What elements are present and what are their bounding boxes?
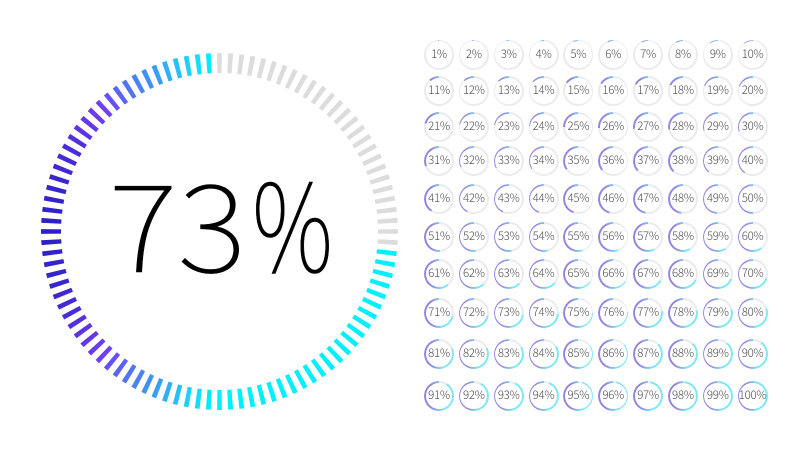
- large radial progress ring at 73%: [41, 53, 398, 410]
- 78%: [668, 298, 698, 328]
- 29%: [703, 112, 733, 142]
- 61%: [424, 259, 454, 289]
- 69%: 69%: [707, 265, 729, 281]
- 9%: [703, 40, 733, 70]
- 25%: 25%: [568, 118, 589, 134]
- 86%: [598, 339, 628, 369]
- 55%: [563, 222, 593, 252]
- 49%: [703, 184, 733, 214]
- 89%: [703, 339, 733, 369]
- 77%: [633, 298, 663, 328]
- 51%: 51%: [428, 228, 450, 244]
- 26%: 26%: [602, 118, 624, 134]
- 65%: [563, 259, 593, 289]
- 1%: 1%: [431, 46, 447, 62]
- 41%: [424, 184, 454, 214]
- 58%: 58%: [672, 228, 694, 244]
- 41%: 41%: [428, 190, 450, 206]
- 12%: 12%: [463, 82, 485, 98]
- 97%: [633, 381, 663, 411]
- 72%: [459, 298, 489, 328]
- 11%: [424, 76, 454, 106]
- 63%: 63%: [498, 265, 520, 281]
- 73%: 73%: [498, 304, 520, 320]
- 51%: [424, 222, 454, 252]
- 33%: 33%: [498, 152, 520, 168]
- 95%: 95%: [568, 387, 589, 403]
- 22%: 22%: [463, 118, 485, 134]
- 5%: [563, 40, 593, 70]
- 31%: 31%: [428, 152, 450, 168]
- 27%: 27%: [637, 118, 659, 134]
- 85%: 85%: [568, 345, 589, 361]
- 99%: [703, 381, 733, 411]
- 5%: 5%: [570, 46, 586, 62]
- 93%: [494, 381, 524, 411]
- 82%: 82%: [463, 345, 485, 361]
- 29%: 29%: [707, 118, 729, 134]
- 47%: [633, 184, 663, 214]
- 8%: [668, 40, 698, 70]
- 6%: 6%: [605, 46, 621, 62]
- 57%: [633, 222, 663, 252]
- gauge row 81 to 90: [424, 339, 768, 369]
- 87%: 87%: [637, 345, 659, 361]
- 65%: 65%: [568, 265, 589, 281]
- 39%: [703, 146, 733, 176]
- 36%: [598, 146, 628, 176]
- 19%: [703, 76, 733, 106]
- 61%: 61%: [428, 265, 450, 281]
- 67%: 67%: [637, 265, 659, 281]
- 48%: [668, 184, 698, 214]
- 52%: 52%: [463, 228, 485, 244]
- 55%: 55%: [568, 228, 589, 244]
- 10%: [738, 40, 768, 70]
- 15%: [563, 76, 593, 106]
- large percentage value: %: [252, 131, 333, 308]
- 71%: [424, 298, 454, 328]
- 38%: 38%: [672, 152, 694, 168]
- 42%: [459, 184, 489, 214]
- 96%: [598, 381, 628, 411]
- 88%: [668, 339, 698, 369]
- 94%: [529, 381, 559, 411]
- 14%: [529, 76, 559, 106]
- 64%: 64%: [533, 265, 554, 281]
- 90%: [738, 339, 768, 369]
- 30%: 30%: [742, 118, 763, 134]
- 71%: 71%: [428, 304, 450, 320]
- 62%: [459, 259, 489, 289]
- 34%: 34%: [533, 152, 554, 168]
- 35%: [563, 146, 593, 176]
- 92%: [459, 381, 489, 411]
- 45%: [563, 184, 593, 214]
- 99%: 99%: [707, 387, 729, 403]
- 79%: 79%: [707, 304, 729, 320]
- gauge row 61 to 70: [424, 259, 768, 289]
- 68%: [668, 259, 698, 289]
- large percentage value: 3: [178, 131, 246, 308]
- 78%: 78%: [672, 304, 694, 320]
- 13%: [494, 76, 524, 106]
- large percentage value: 7: [109, 131, 177, 308]
- 73%: [494, 298, 524, 328]
- 47%: 47%: [637, 190, 659, 206]
- 3%: [494, 40, 524, 70]
- gauge row 71 to 80: [424, 298, 768, 328]
- 68%: 68%: [672, 265, 694, 281]
- 12%: [459, 76, 489, 106]
- 82%: [459, 339, 489, 369]
- 42%: 42%: [463, 190, 485, 206]
- 17%: 17%: [637, 82, 659, 98]
- 74%: [529, 298, 559, 328]
- 46%: 46%: [602, 190, 624, 206]
- 16%: 16%: [602, 82, 624, 98]
- 52%: [459, 222, 489, 252]
- 81%: [424, 339, 454, 369]
- gauge row 41 to 50: [424, 184, 768, 214]
- 81%: 81%: [428, 345, 450, 361]
- 60%: [738, 222, 768, 252]
- 40%: 40%: [742, 152, 763, 168]
- 18%: 18%: [672, 82, 694, 98]
- 50%: [738, 184, 768, 214]
- 85%: [563, 339, 593, 369]
- 48%: 48%: [672, 190, 694, 206]
- 27%: [633, 112, 663, 142]
- 3%: 3%: [501, 46, 517, 62]
- gauge row 91 to 100: [424, 381, 768, 411]
- 59%: 59%: [707, 228, 729, 244]
- 66%: 66%: [602, 265, 624, 281]
- 56%: 56%: [602, 228, 624, 244]
- 46%: [598, 184, 628, 214]
- 70%: [738, 259, 768, 289]
- 100%: 100%: [739, 387, 766, 403]
- 60%: 60%: [742, 228, 763, 244]
- 9%: 9%: [710, 46, 726, 62]
- 2%: [459, 40, 489, 70]
- 28%: 28%: [672, 118, 694, 134]
- 43%: 43%: [498, 190, 520, 206]
- 87%: [633, 339, 663, 369]
- 53%: 53%: [498, 228, 520, 244]
- 83%: [494, 339, 524, 369]
- 38%: [668, 146, 698, 176]
- 76%: 76%: [602, 304, 624, 320]
- 84%: [529, 339, 559, 369]
- 10%: 10%: [742, 46, 763, 62]
- 57%: 57%: [637, 228, 659, 244]
- 90%: 90%: [742, 345, 763, 361]
- 80%: [738, 298, 768, 328]
- 67%: [633, 259, 663, 289]
- 21%: [424, 112, 454, 142]
- 50%: 50%: [742, 190, 763, 206]
- 32%: 32%: [463, 152, 485, 168]
- 69%: [703, 259, 733, 289]
- 7%: [633, 40, 663, 70]
- 18%: [668, 76, 698, 106]
- 36%: 36%: [602, 152, 624, 168]
- 39%: 39%: [707, 152, 729, 168]
- 96%: 96%: [602, 387, 624, 403]
- 77%: 77%: [637, 304, 659, 320]
- 43%: [494, 184, 524, 214]
- 95%: [563, 381, 593, 411]
- 26%: [598, 112, 628, 142]
- 75%: [563, 298, 593, 328]
- 64%: [529, 259, 559, 289]
- 76%: [598, 298, 628, 328]
- 6%: [598, 40, 628, 70]
- 94%: 94%: [533, 387, 554, 403]
- 35%: 35%: [568, 152, 589, 168]
- 44%: [529, 184, 559, 214]
- 49%: 49%: [707, 190, 729, 206]
- 15%: 15%: [568, 82, 589, 98]
- 2%: 2%: [466, 46, 482, 62]
- 63%: [494, 259, 524, 289]
- 37%: [633, 146, 663, 176]
- 59%: [703, 222, 733, 252]
- gauge row 1 to 10: [424, 40, 768, 70]
- 98%: 98%: [672, 387, 694, 403]
- 62%: 62%: [463, 265, 485, 281]
- 20%: [738, 76, 768, 106]
- 70%: 70%: [742, 265, 763, 281]
- 22%: [459, 112, 489, 142]
- 75%: 75%: [568, 304, 589, 320]
- 8%: 8%: [675, 46, 691, 62]
- 86%: 86%: [602, 345, 624, 361]
- 88%: 88%: [672, 345, 694, 361]
- 89%: 89%: [707, 345, 729, 361]
- 72%: 72%: [463, 304, 485, 320]
- 23%: [494, 112, 524, 142]
- 24%: 24%: [533, 118, 554, 134]
- gauge row 11 to 20: [424, 76, 768, 106]
- 44%: 44%: [533, 190, 554, 206]
- 54%: 54%: [533, 228, 554, 244]
- 84%: 84%: [533, 345, 554, 361]
- 98%: [668, 381, 698, 411]
- 13%: 13%: [498, 82, 520, 98]
- 100%: [738, 381, 768, 411]
- 91%: [424, 381, 454, 411]
- 56%: [598, 222, 628, 252]
- 14%: 14%: [533, 82, 554, 98]
- 54%: [529, 222, 559, 252]
- 4%: 4%: [536, 46, 551, 62]
- 93%: 93%: [498, 387, 520, 403]
- 40%: [738, 146, 768, 176]
- 74%: 74%: [533, 304, 554, 320]
- 17%: [633, 76, 663, 106]
- 28%: [668, 112, 698, 142]
- 97%: 97%: [637, 387, 659, 403]
- 34%: [529, 146, 559, 176]
- 7%: 7%: [640, 46, 656, 62]
- gauge row 21 to 30: [424, 112, 768, 142]
- 58%: [668, 222, 698, 252]
- 16%: [598, 76, 628, 106]
- 83%: 83%: [498, 345, 520, 361]
- 53%: [494, 222, 524, 252]
- 1%: [424, 40, 454, 70]
- 32%: [459, 146, 489, 176]
- 4%: [529, 40, 559, 70]
- 91%: 91%: [428, 387, 450, 403]
- 30%: [738, 112, 768, 142]
- 80%: 80%: [742, 304, 763, 320]
- 19%: 19%: [707, 82, 729, 98]
- 21%: 21%: [428, 118, 450, 134]
- gauge row 51 to 60: [424, 222, 768, 252]
- 23%: 23%: [498, 118, 520, 134]
- 31%: [424, 146, 454, 176]
- 11%: 11%: [428, 82, 450, 98]
- 45%: 45%: [568, 190, 589, 206]
- 20%: 20%: [742, 82, 763, 98]
- 66%: [598, 259, 628, 289]
- 33%: [494, 146, 524, 176]
- 24%: [529, 112, 559, 142]
- 37%: 37%: [637, 152, 659, 168]
- gauge row 31 to 40: [424, 146, 768, 176]
- 25%: [563, 112, 593, 142]
- 92%: 92%: [463, 387, 485, 403]
- 79%: [703, 298, 733, 328]
